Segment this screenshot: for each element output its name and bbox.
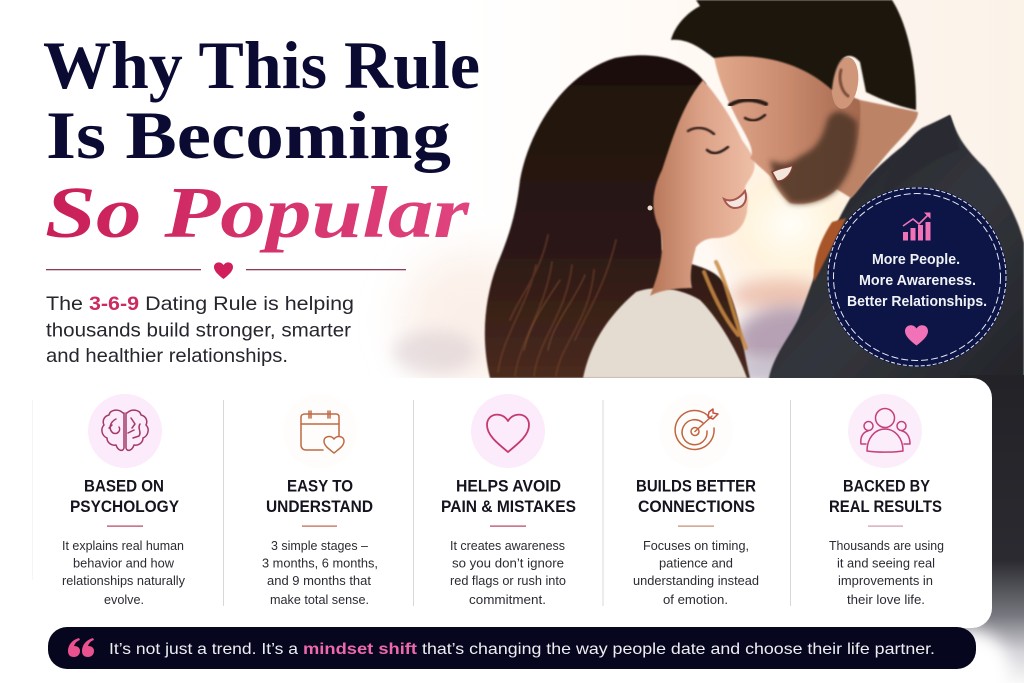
description: 3 months, 6 months, <box>262 556 378 570</box>
icon: growth chart <box>903 212 930 240</box>
description: and 9 months that <box>267 574 372 588</box>
description <box>262 539 378 607</box>
description: commitment. <box>469 593 546 607</box>
description: patience and <box>659 556 733 570</box>
woman's sweater <box>583 288 747 378</box>
heading: BASED ON <box>84 478 164 496</box>
quote text <box>109 641 935 658</box>
woman's face <box>648 80 755 296</box>
column: helps avoid pain and mistakes <box>441 394 576 607</box>
column: builds better connections <box>633 394 759 607</box>
intro paragraph: and healthier relationships. <box>46 345 288 367</box>
quote text: It’s not just a trend. It’s a <box>109 641 298 658</box>
icon: badge heart <box>905 325 928 346</box>
description: improvements in <box>838 574 933 588</box>
description: It explains real human <box>62 539 184 553</box>
title: Why This Rule <box>43 27 480 103</box>
heart divider <box>46 262 406 279</box>
badge text: More People. <box>872 252 960 268</box>
jacket continuing beside card, fading out <box>926 375 1024 683</box>
heading: BUILDS BETTER <box>636 478 756 496</box>
title <box>43 27 480 253</box>
heading: CONNECTIONS <box>638 498 755 516</box>
woman's hair <box>485 55 750 378</box>
column: easy to understand <box>262 394 378 607</box>
badge text <box>847 252 987 310</box>
description: Focuses on timing, <box>643 539 749 553</box>
sky and city haze <box>393 0 1024 390</box>
heading <box>70 478 179 516</box>
heading <box>829 478 942 516</box>
description: understanding instead <box>633 574 759 588</box>
description: It creates awareness <box>450 539 565 553</box>
icon: target with arrow <box>659 394 733 468</box>
badge text: More Awareness. <box>859 273 976 289</box>
description <box>450 539 566 607</box>
description: of emotion. <box>663 593 728 607</box>
heading: PAIN & MISTAKES <box>441 498 576 516</box>
heading: HELPS AVOID <box>456 478 561 496</box>
icon: heart <box>471 394 545 468</box>
intro paragraph: thousands build stronger, smarter <box>46 320 352 342</box>
description: make total sense. <box>270 593 369 607</box>
couple photo <box>393 0 1024 390</box>
icon: calendar with heart <box>283 394 357 468</box>
icon: group of people <box>848 394 922 468</box>
description: their love life. <box>847 593 925 607</box>
description <box>829 539 944 607</box>
icon: brain <box>88 394 162 468</box>
description: it and seeing real <box>837 556 935 570</box>
description: red flags or rush into <box>450 574 566 588</box>
heading: UNDERSTAND <box>266 498 373 516</box>
description: evolve. <box>104 593 144 607</box>
description: Thousands are using <box>829 539 944 553</box>
heading <box>636 478 756 516</box>
description: relationships naturally <box>62 574 186 588</box>
benefits card <box>0 378 992 628</box>
description <box>62 539 186 607</box>
heading: BACKED BY <box>843 478 930 496</box>
icon: quote marks <box>68 638 94 657</box>
man's hair <box>671 0 916 110</box>
title: So Popular <box>45 172 470 253</box>
column: backed by real results <box>829 394 944 607</box>
quote text: that’s changing the way people date and choose their life partner. <box>422 641 935 658</box>
heading <box>441 478 576 516</box>
man's jacket <box>768 115 1024 383</box>
description <box>633 539 759 607</box>
quote bar <box>48 627 976 669</box>
quote text: mindset shift <box>303 641 418 658</box>
title: Is Becoming <box>46 97 451 173</box>
intro paragraph <box>46 293 354 367</box>
heading <box>266 478 373 516</box>
man's neck and face <box>714 54 918 204</box>
badge text: Better Relationships. <box>847 294 987 310</box>
heading: REAL RESULTS <box>829 498 942 516</box>
heading: PSYCHOLOGY <box>70 498 179 516</box>
column: based on psychology <box>62 394 186 607</box>
heading: EASY TO <box>287 478 353 496</box>
description: 3 simple stages – <box>271 539 368 553</box>
description: behavior and how <box>73 556 175 570</box>
badge <box>827 187 1007 367</box>
intro paragraph: The 3-6-9 Dating Rule is helping <box>46 293 354 315</box>
description: so you don’t ignore <box>452 556 564 570</box>
